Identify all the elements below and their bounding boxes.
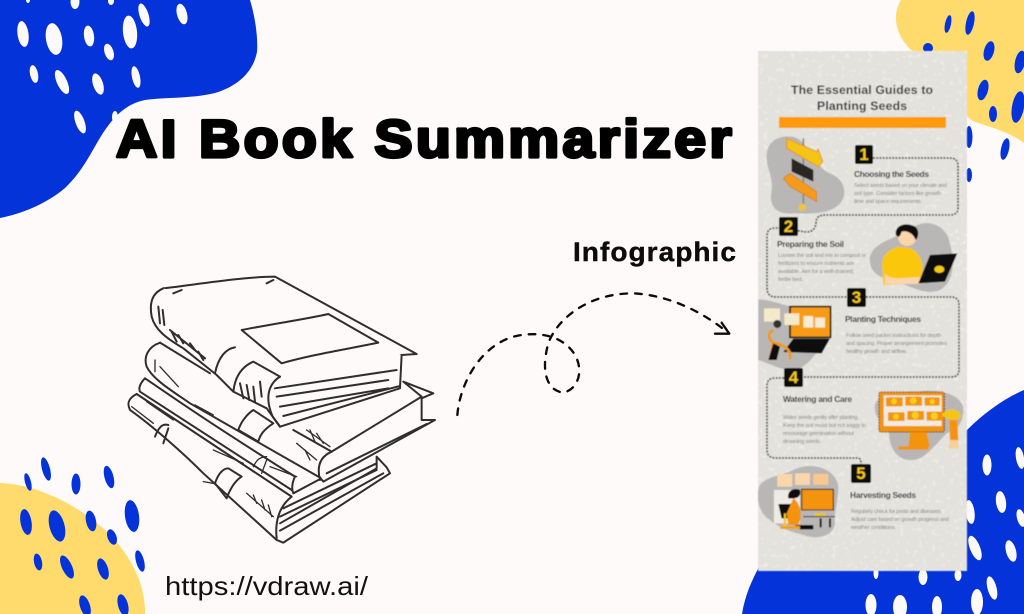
- step 4: Keep the soil moist but not soggy to: [783, 423, 866, 429]
- illustration 4: monitor with thumbnails: [875, 391, 963, 460]
- icon: stack of sketched books: [128, 277, 435, 543]
- step 4: Water seeds gently after planting.: [783, 415, 859, 421]
- step 1: Choosing the Seeds: [854, 169, 929, 179]
- step 3: Planting Techniques: [845, 314, 921, 324]
- step 4: drowning seeds.: [783, 439, 821, 445]
- step 4: [783, 368, 866, 445]
- step 3: and spacing. Proper arrangement promotes: [846, 341, 947, 347]
- step 1: Select seeds based on your climate and: [854, 183, 947, 189]
- step 4: encourage germination without: [783, 431, 854, 437]
- step 2: Loosen the soil and mix in compost or: [778, 253, 866, 259]
- step 1: 1: [859, 145, 869, 164]
- step 2: fertilizers to ensure nutrients are: [778, 261, 854, 267]
- step 5: weather conditions.: [850, 525, 896, 531]
- url: https://vdraw.ai/: [165, 571, 369, 601]
- step 3: 3: [852, 288, 861, 307]
- panel title: Planting Seeds: [817, 99, 907, 113]
- title: AI Book Summarizer: [116, 109, 732, 169]
- step 5: 5: [856, 464, 866, 483]
- panel title: [791, 83, 933, 113]
- second book: [146, 343, 435, 482]
- step 3: healthy growth and airflow.: [846, 349, 907, 355]
- step 3: [845, 288, 947, 355]
- panel: infographic preview: [758, 51, 967, 571]
- label: infographic: Infographic: [573, 236, 736, 267]
- dotted connector: [767, 158, 959, 464]
- step 2: Preparing the Soil: [777, 239, 844, 249]
- step 1: [854, 145, 947, 205]
- step 5: Regularly check for pests and diseases.: [851, 509, 942, 515]
- blob: bottom-right blue with dots: [742, 390, 1024, 614]
- step 2: fertile bed.: [778, 277, 803, 283]
- step 4: 4: [789, 368, 799, 387]
- arrow: dashed loop to infographic: [457, 293, 729, 415]
- illustration 5: person at desk: [758, 466, 838, 537]
- step 2: [777, 217, 866, 283]
- step 3: Follow seed packet instructions for depth: [846, 333, 941, 339]
- step 2: available. Aim for a well-drained,: [778, 269, 854, 275]
- step 5: [850, 464, 949, 531]
- step 2: 2: [784, 217, 793, 236]
- step 1: soil type. Consider factors like growth: [854, 191, 941, 197]
- bottom book: [128, 394, 390, 543]
- illustration 3: laptop with notes: [758, 299, 832, 370]
- step 5: Harvesting Seeds: [850, 490, 916, 500]
- blob: top-right yellow with dots: [896, 0, 1024, 182]
- step 5: Adjust care based on growth progress and: [851, 517, 949, 523]
- panel title: The Essential Guides to: [791, 83, 933, 97]
- title bar: [779, 117, 946, 128]
- blob: top-left blue with dots: [0, 0, 257, 218]
- step 4: Watering and Care: [783, 394, 852, 404]
- illustration 1: signpost: [767, 136, 844, 214]
- blob: bottom-left yellow with dots: [0, 456, 147, 614]
- step 1: time and space requirements.: [854, 199, 922, 205]
- third book: [139, 378, 318, 493]
- top book: [151, 277, 417, 427]
- illustration 2: person with laptop: [870, 223, 957, 292]
